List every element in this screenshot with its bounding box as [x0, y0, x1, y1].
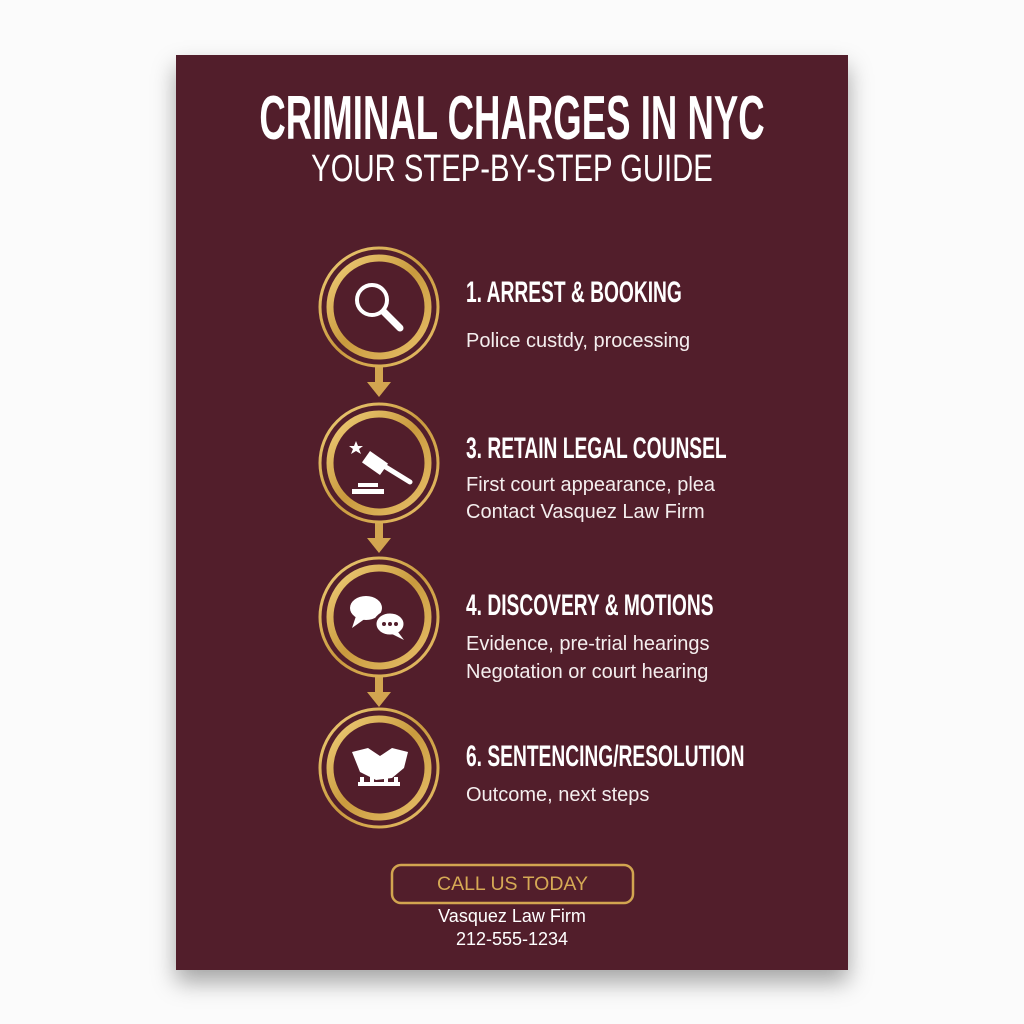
text: 3. RETAIN LEGAL COUNSEL: [466, 432, 727, 465]
icon: magnifier: [357, 285, 400, 328]
text: First court appearance, plea: [466, 474, 715, 496]
text: Outcome, next steps: [466, 784, 649, 806]
text: Contact Vasquez Law Firm: [466, 501, 705, 523]
text: 4. DISCOVERY & MOTIONS: [466, 589, 714, 622]
icon: gavel: [349, 441, 410, 494]
text: Police custdy, processing: [466, 330, 690, 352]
contact: Vasquez Law Firm: [438, 906, 586, 926]
icon: chat bubbles: [350, 596, 405, 640]
circle 1: [320, 248, 438, 366]
subtitle: YOUR STEP-BY-STEP GUIDE: [311, 148, 713, 190]
text: Evidence, pre-trial hearings: [466, 633, 709, 655]
arrows: [367, 367, 391, 707]
title: CRIMINAL CHARGES IN NYC: [259, 84, 765, 153]
text: 6. SENTENCING/RESOLUTION: [466, 740, 744, 773]
step 6: [466, 740, 744, 806]
text: 1. ARREST & BOOKING: [466, 276, 682, 309]
circle 4: [320, 709, 438, 827]
call button text: CALL US TODAY: [437, 873, 588, 895]
contact: [438, 906, 586, 949]
circle 2: [320, 404, 438, 522]
contact: 212-555-1234: [456, 929, 568, 949]
step 3: [466, 432, 727, 523]
button outline: [392, 865, 633, 903]
poster background: [176, 55, 848, 970]
icon: handshake: [352, 748, 408, 786]
step 1: [466, 276, 690, 352]
step 4: [466, 589, 714, 683]
circle 3: [320, 558, 438, 676]
text: Negotation or court hearing: [466, 661, 708, 683]
